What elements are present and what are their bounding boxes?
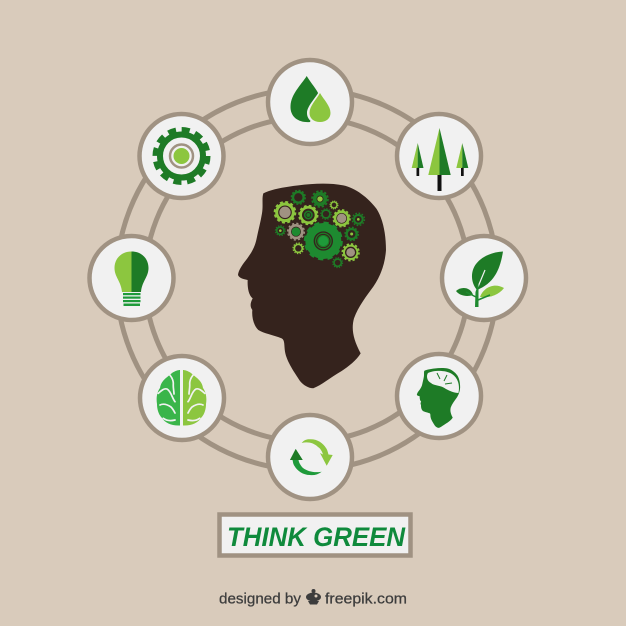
head silhouette with gears [238, 184, 386, 388]
icon: water drops [290, 76, 333, 124]
gear 5 [330, 201, 338, 209]
gear 8 [352, 213, 364, 225]
gear 3 [312, 191, 328, 207]
gear 12 [345, 227, 358, 241]
ring: connecting double band [116, 89, 498, 470]
footer credit [219, 589, 407, 608]
badge: trees [397, 114, 481, 198]
icon: trees [412, 128, 468, 191]
icon: head with brain [417, 368, 460, 428]
gear 13 [293, 243, 304, 254]
badge: light bulb [90, 236, 174, 320]
icon: freepik logo [306, 589, 321, 604]
title banner [220, 514, 410, 556]
icon: light bulb [114, 252, 148, 306]
badge: water drops [268, 60, 352, 144]
gear 14 [342, 244, 359, 261]
gear 15 [333, 258, 343, 268]
badge: recycle arrows [268, 415, 352, 499]
gear 2 [291, 190, 305, 204]
credit text left: designed by [219, 590, 301, 608]
gears [275, 190, 364, 268]
badge: brain [140, 356, 224, 440]
head shape [238, 184, 386, 388]
gear 11: large [305, 223, 342, 259]
icon: gear [156, 130, 208, 182]
gear 7 [333, 210, 350, 227]
gear 6 [321, 209, 331, 219]
gear 4 [299, 206, 318, 224]
title text: THINK GREEN [227, 522, 405, 552]
icon: recycle arrows [290, 439, 333, 475]
icon: brain halves [157, 370, 206, 426]
gear 10 [288, 223, 304, 240]
gear 9 [275, 226, 285, 236]
badge: head with brain [397, 354, 481, 438]
badge: gear [140, 114, 224, 198]
credit text right: freepik.com [325, 590, 407, 608]
gear 1 [275, 202, 295, 223]
badge: leaf [442, 236, 526, 320]
icon: plant leaves [456, 252, 504, 307]
